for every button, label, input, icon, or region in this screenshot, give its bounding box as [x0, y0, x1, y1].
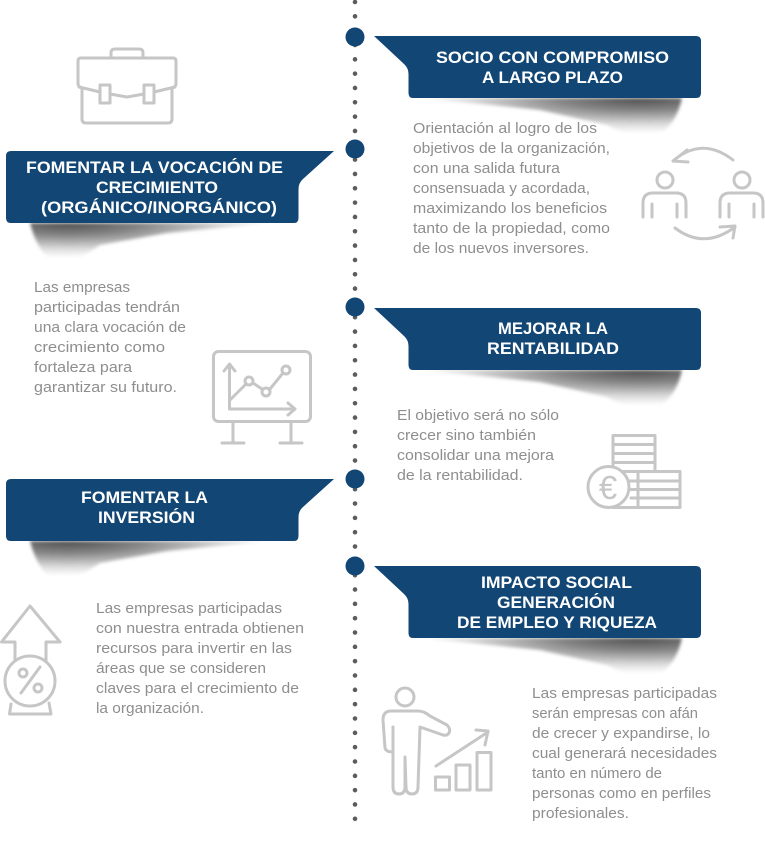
text block: personas como en perfiles [532, 786, 711, 802]
heading: (ORGÁNICO/INORGÁNICO) [41, 198, 277, 217]
text block: serán empresas con afán [532, 706, 698, 722]
icon: chart on presentation board [214, 352, 310, 443]
text block: la organización. [96, 701, 204, 717]
banner shadow [30, 223, 270, 262]
icon: up arrow with percent [2, 606, 60, 714]
banner shadow [420, 370, 682, 410]
timeline node 3 [346, 298, 364, 316]
text block: participadas tendrán [34, 300, 180, 316]
panel: fomentar la vocación [6, 151, 334, 396]
text block: una clara vocación de [34, 320, 186, 336]
text block: de la rentabilidad. [397, 468, 523, 484]
text block: profesionales. [532, 806, 629, 822]
banner [6, 479, 334, 541]
text block: Las empresas [34, 280, 130, 296]
heading: RENTABILIDAD [487, 339, 619, 358]
heading: GENERACIÓN [497, 593, 615, 612]
timeline dotted line [353, 2, 357, 820]
panel: impacto social [374, 566, 721, 822]
text block: crecer sino también [397, 428, 536, 444]
banner [6, 151, 334, 223]
text block: tanto en número de [532, 766, 662, 782]
text block: áreas que se consideren [96, 661, 266, 677]
text block: objetivos de la organización, [413, 141, 610, 157]
icon: coins with euro [588, 436, 680, 508]
heading: FOMENTAR LA VOCACIÓN DE [26, 158, 283, 177]
text block: cual generará necesidades [532, 746, 717, 762]
banner [374, 36, 701, 98]
text block: con una salida futura [413, 161, 561, 177]
banner shadow [30, 541, 270, 580]
text block: Las empresas participadas [532, 686, 717, 702]
banner shadow [420, 638, 682, 678]
text block: El objetivo será no sólo [397, 408, 559, 424]
icon: briefcase [78, 49, 176, 123]
timeline node 2 [346, 140, 364, 158]
heading: SOCIO CON COMPROMISO [436, 48, 669, 67]
heading: DE EMPLEO Y RIQUEZA [457, 613, 657, 632]
heading: A LARGO PLAZO [482, 68, 623, 87]
timeline node 4 [346, 470, 364, 488]
heading: CRECIMIENTO [96, 178, 218, 197]
text block: garantizar su futuro. [34, 380, 177, 396]
text block: Orientación al logro de los [413, 121, 597, 137]
panel: fomentar la inversión [6, 479, 334, 717]
panel: mejorar la rentabilidad [374, 308, 701, 484]
text block: fortaleza para [34, 360, 133, 376]
text block: maximizando los beneficios [413, 201, 607, 217]
timeline node 5 [346, 556, 364, 576]
text block: de crecer y expandirse, lo [532, 726, 710, 742]
text block: con nuestra entrada obtienen [96, 621, 304, 637]
banner [374, 308, 701, 370]
text block: de los nuevos inversores. [413, 241, 589, 257]
text block: consensuada y acordada, [413, 181, 590, 197]
heading: FOMENTAR LA [81, 488, 208, 507]
text block: recursos para invertir en las [96, 641, 292, 657]
panel: socio con compromiso [374, 36, 701, 257]
text block: tanto de la propiedad, como [413, 221, 610, 237]
heading: IMPACTO SOCIAL [481, 573, 632, 592]
banner shadow [420, 98, 682, 138]
heading: INVERSIÓN [98, 508, 195, 527]
text block: claves para el crecimiento de [96, 681, 299, 697]
icon: person pointing at growth bars [383, 688, 491, 794]
icon: two people exchanging [643, 148, 763, 239]
banner [374, 566, 701, 638]
text block: Las empresas participadas [96, 601, 282, 617]
text block: crecimiento como [34, 340, 165, 356]
heading: MEJORAR LA [498, 319, 608, 338]
timeline node 1 [346, 28, 364, 46]
text block: consolidar una mejora [397, 448, 555, 464]
icon: coins with euro: € [599, 469, 617, 506]
